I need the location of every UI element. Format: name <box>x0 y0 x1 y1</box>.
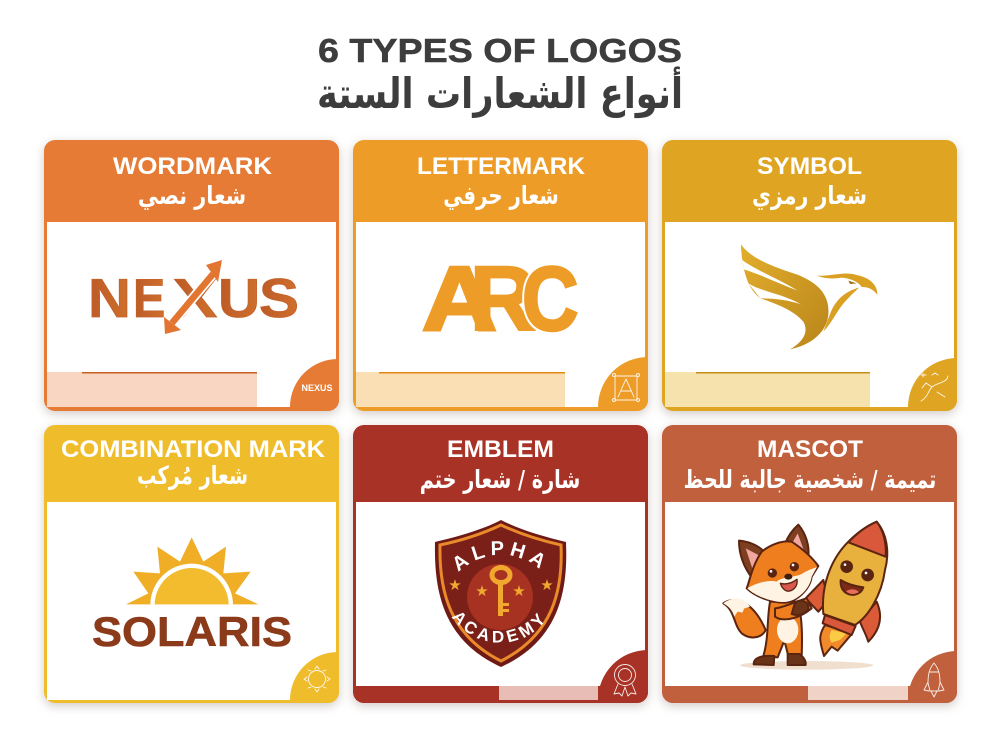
lettermark heading <box>417 153 586 211</box>
NEXUS logo: N <box>88 268 131 329</box>
fox and rocket mascot <box>723 522 887 670</box>
combination mark heading: شعار مُركب <box>137 462 248 491</box>
wordmark heading: شعار نصي <box>138 182 246 211</box>
wordmark corner badge <box>290 359 339 411</box>
NEXUS logo <box>88 260 299 334</box>
page title <box>317 32 683 119</box>
mascot strip <box>808 686 908 700</box>
panel: mascot <box>657 423 962 711</box>
emblem text <box>452 541 544 642</box>
NEXUS logo: E <box>133 267 165 329</box>
SOLARIS logo <box>92 537 292 655</box>
NEXUS logo: S <box>259 268 299 329</box>
SOLARIS logo: SOLARIS <box>92 608 292 655</box>
NEXUS logo: X <box>172 267 217 329</box>
panel: lettermark <box>348 138 653 419</box>
symbol heading <box>752 153 867 211</box>
ARC logo <box>422 247 579 350</box>
lettermark heading: LETTERMARK <box>417 153 586 180</box>
ARC logo: R <box>470 249 536 350</box>
emblem strip <box>499 686 598 700</box>
wordmark heading: WORDMARK <box>113 153 273 180</box>
fox tail <box>723 600 766 637</box>
emblem heading: EMBLEM <box>447 436 554 463</box>
ARC logo: A <box>422 248 497 350</box>
stars: ★ <box>540 576 554 594</box>
symbol corner badge <box>908 358 957 411</box>
lettermark corner badge <box>598 357 648 411</box>
emblem corner badge <box>356 650 648 703</box>
ARC logo: C <box>522 247 579 349</box>
fox head <box>739 541 764 578</box>
wordmark strip <box>47 372 257 407</box>
panel: emblem <box>348 423 653 711</box>
symbol strip <box>665 372 870 407</box>
wordmark corner badge: NEXUS <box>302 383 332 394</box>
combination mark heading: COMBINATION MARK <box>61 436 326 463</box>
stars: ★ <box>512 582 526 600</box>
emblem heading: شارة / شعار ختم <box>420 466 580 495</box>
lettermark strip <box>356 372 565 407</box>
page title: 6 TYPES OF LOGOS <box>318 32 682 69</box>
panel: wordmark <box>39 138 344 419</box>
ARC logo: C <box>522 247 579 349</box>
combination corner badge <box>290 652 339 703</box>
emblem text: ACADEMY <box>452 612 544 642</box>
fox body <box>763 602 802 657</box>
symbol heading: شعار رمزي <box>752 182 867 211</box>
symbol heading: SYMBOL <box>757 153 862 180</box>
panel: combination mark <box>39 423 344 711</box>
eagle symbol <box>741 244 877 349</box>
stars: ★ <box>448 576 462 594</box>
fox arm <box>775 598 812 619</box>
NEXUS logo: U <box>218 268 260 330</box>
mascot heading: تميمة / شخصية جالبة للحظ <box>684 466 936 495</box>
lettermark heading: شعار حرفي <box>443 182 559 211</box>
mascot heading: MASCOT <box>757 436 863 463</box>
page title: أنواع الشعارات الستة <box>317 66 683 119</box>
mascot heading <box>684 436 936 495</box>
emblem text: ALPHA <box>454 541 544 572</box>
mascot corner badge <box>665 651 957 703</box>
panel: symbol <box>657 138 962 419</box>
rocket <box>806 522 887 656</box>
key <box>492 568 510 616</box>
stars: ★ <box>475 582 489 600</box>
stars <box>448 576 554 600</box>
combination mark heading <box>61 436 326 491</box>
wordmark heading <box>113 153 273 211</box>
Alpha Academy shield <box>434 520 566 667</box>
sun mark <box>126 538 258 604</box>
ground shadow <box>740 661 873 670</box>
emblem heading <box>420 436 580 495</box>
